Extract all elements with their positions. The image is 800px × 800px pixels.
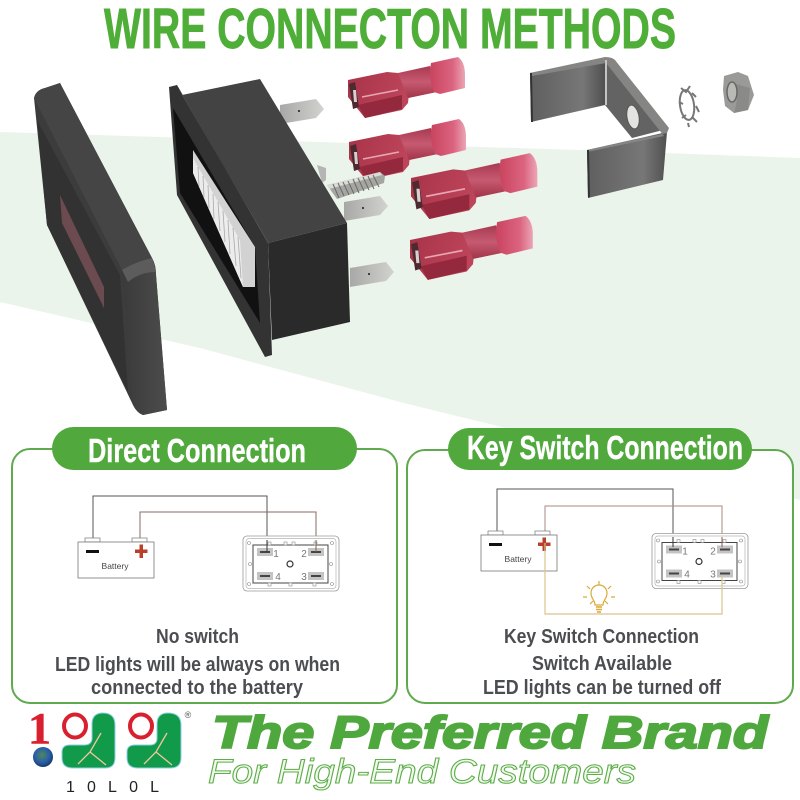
threaded screw <box>327 172 385 199</box>
product: crimp connectors <box>348 57 537 280</box>
panel: direct connection <box>12 427 397 703</box>
description: direct <box>55 625 340 699</box>
logo: 10L0L: ® <box>185 710 192 720</box>
meter display strip <box>193 150 255 287</box>
logo: 10L0L: 1 <box>28 704 51 753</box>
description: key switch <box>483 625 721 699</box>
icon: light bulb <box>583 581 615 612</box>
slogan: the preferred brand: The Preferred Brand <box>212 707 770 758</box>
logo: 10L0L <box>28 704 192 796</box>
description: key switch: LED lights can be turned off <box>483 676 721 699</box>
description: direct: connected to the battery <box>91 676 304 699</box>
bezel display window <box>60 195 104 308</box>
logo: 10L0L: 10L0L <box>66 779 159 796</box>
product: star washer <box>678 86 699 127</box>
description: key switch: Switch Available <box>532 652 672 675</box>
wiring diagram: key switch <box>481 489 748 614</box>
product: terminal tabs <box>280 99 394 287</box>
product: metal bracket <box>530 57 669 198</box>
icon: globe <box>33 747 53 767</box>
background band <box>0 132 800 500</box>
description: direct: LED lights will be always on when <box>55 653 340 676</box>
product: hex nut <box>723 72 754 113</box>
slogan: for high-end customers: For High-End Customers <box>208 753 636 791</box>
panel: key switch connection <box>407 428 793 703</box>
product: meter housing <box>169 79 350 357</box>
heading pill: direct connection: Direct Connection <box>88 432 306 469</box>
wiring diagram: direct <box>78 496 339 591</box>
product: front bezel <box>34 83 167 415</box>
description: key switch: Key Switch Connection <box>504 625 699 648</box>
description: direct: No switch <box>156 625 239 648</box>
